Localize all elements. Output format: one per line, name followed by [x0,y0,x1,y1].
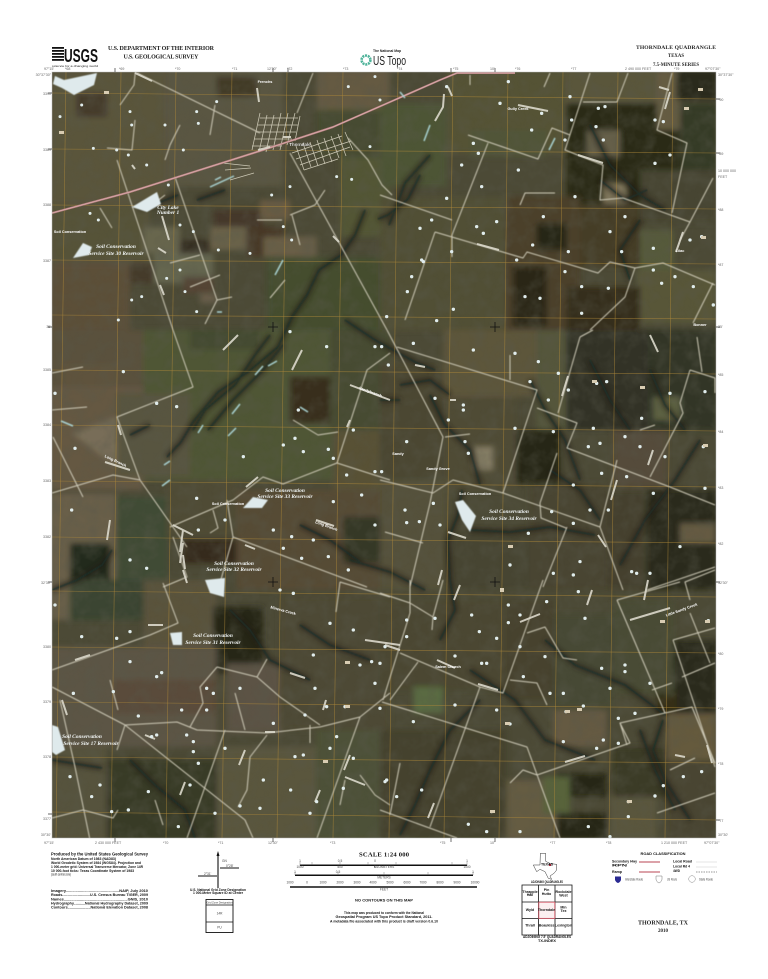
top coordinates: 97°15' [44,67,54,71]
bar labels: 0 [306,880,308,884]
local road swatch [696,862,717,867]
lake: Site 31 reservoir [170,632,182,645]
bottom coordinates: *73 [330,841,335,845]
top coordinates: *72 [287,67,292,71]
bar labels: FEET [380,888,388,892]
left coordinates: 3390 [43,92,51,96]
map margin coordinates and ticks [36,67,736,845]
bottom coordinates: 10' [490,841,495,845]
quadrangle name: THORNDALE QUADRANGLE [636,45,716,51]
label: Site 34 reservoir: Soil Conservation [489,509,529,515]
neighbor names: West [559,894,569,898]
state: TEXAS [668,54,684,59]
icon: interstate shield [615,876,621,883]
left coordinates: 3389 [43,148,51,152]
bar labels: 9000 [453,880,461,884]
label: Long Branch: Long Branch [104,454,127,468]
right road labels: 4WD [673,869,680,873]
survey name: U.S. GEOLOGICAL SURVEY [124,54,199,60]
ramp swatch [639,871,660,873]
bottom coordinates: *70 [163,841,168,845]
right coordinates: 32'30" [718,581,729,585]
label: Thrall Cemetery: Frenchs [258,80,272,84]
left coordinates: 3379 [43,700,51,704]
bar labels: 5000 [386,880,394,884]
adjoining quadrangles index [522,880,572,943]
index footer: TX-INDEX [538,939,557,943]
box labels: Grid Zone Designation [207,900,233,904]
Texas label: TEXAS [541,862,554,866]
box labels: 14R [217,912,223,916]
US route label: US Route [667,878,677,882]
bar labels: 0.5 [338,859,342,863]
bar labels: 1000 [296,865,304,869]
left coordinates: 30°30' [41,833,51,837]
right coordinates: *87 [718,263,723,267]
bottom coordinates: 97°15' [44,841,54,845]
map labels [54,80,707,747]
bar labels: 7000 [419,880,427,884]
index footer: ADJOINING 7.5' QUADRANGLES [523,935,572,939]
label: Site 31 reservoir second line: Service Site 31 Reservoir [185,640,242,646]
data sources: Roads...........................U.S. Census Bureau TIGER, 2009 [51,893,148,897]
label: Long Branch east: Long Branch [315,520,339,532]
neighbor names: Wyld [526,908,534,912]
neighbor names: Lexington [555,924,572,928]
bottom coordinates: 2 430 000 FEET [95,841,122,845]
legend: road classification [612,852,717,883]
national map caption: The National Map [373,49,401,53]
meters bar [295,874,473,876]
bar labels: 1000 [286,880,294,884]
lake: Site 30 reservoir [73,243,92,258]
label: cemetery: Sandy Grove [426,467,450,471]
production heading: Produced by the United States Geological Survey [51,852,148,856]
label: dam name: Soil Conservation [54,230,87,234]
bar labels: 3000 [353,880,361,884]
left coordinates: 3385 [43,368,51,372]
right coordinates: *83 [718,486,723,490]
lake: City Lake Number 1 [132,192,161,212]
data sources: Imagery.................................................NAIP, July 2010 [51,889,148,893]
header: US Topo logo [362,49,406,68]
left coordinates: 3380 [43,645,51,649]
left coordinates: 3384 [43,423,51,427]
icon: USGS wave logo [52,47,64,61]
4WD swatch [696,871,717,873]
bar labels: 0.5 [336,870,340,874]
datum and projection lines: 1 000-meter grid: Universal Transverse Mercator, Zone 14R [51,865,143,869]
tan cleared pads [59,88,710,813]
bar labels: 10000 [471,880,480,884]
quarter-quad cross markers [268,322,500,587]
mottled vegetation texture [52,72,716,838]
label: City Lake Number 1: City Lake [157,205,179,211]
label: Site 33 reservoir: Soil Conservation [265,488,305,494]
neighbor names: Min [560,906,567,910]
lakes and reservoirs [52,73,555,755]
header: USGS logo and agency [52,45,215,68]
label: Gold Creek: Gully Creek [507,107,529,111]
top coordinates: 97°07'30" [705,67,721,71]
right road labels: Local Road [673,860,692,864]
box frame [206,900,233,932]
icon: US Topo emblem [362,56,370,64]
top coordinates: *71 [232,67,237,71]
right coordinates: *77 [718,819,723,823]
index heading: ADJOINING QUADRANGLES [531,880,563,884]
wooded stream corridors [52,125,700,838]
label: town on east edge: Lilac [676,249,684,253]
top coordinates: 2 490 000 FEET [625,67,652,71]
bottom coordinates: 97°07'30" [704,841,720,845]
label: Site 30 reservoir: Soil Conservation [96,244,136,250]
left coordinates: 3383 [43,479,51,483]
right coordinates: *90 [718,98,723,102]
declination labels: GN [222,859,227,863]
left road labels: Ramp [612,870,623,874]
right coordinates: 10 000 000 [718,169,736,173]
lake: Site 34 reservoir [455,500,476,532]
right coordinates: *78 [718,762,723,766]
quad location marker [549,864,551,866]
right coordinates: *82 [718,542,723,546]
declination labels: 0°28' [226,864,234,868]
neighbor names: Pin [544,888,549,892]
label: Site 33 reservoir second line: Service Site 33 Reservoir [257,494,314,500]
bar labels: 8000 [436,880,444,884]
right coordinates: 30°30' [718,833,728,837]
label: City Lake Number 1 second line: Number 1 [156,210,179,216]
top coordinates: *79 [674,67,679,71]
top coordinates: *75 [453,67,458,71]
neighbor names: Thrapple [522,890,538,894]
neighbor names: Thorndale [538,908,555,912]
datum and projection lines: World Geodetic System of 1984 (WGS84). Projection and [51,861,141,865]
highway [52,73,515,213]
right coordinates: 30°37'30" [718,73,734,77]
state route label: State Route [699,878,713,882]
left coordinates: 30°37'30" [36,73,52,77]
bottom coordinates: *77 [550,841,555,845]
bar labels: 500 [337,865,343,869]
label: Site label road: Salem Church [435,665,461,669]
Thorndale highlight [539,902,555,918]
right coordinates: *89 [718,152,723,156]
label: Site 32 reservoir: Soil Conservation [214,561,254,567]
top coordinates: 10' [490,67,495,71]
label: Sandy Creek: Sandybranch [358,386,383,398]
lake: Site 33 reservoir [243,497,268,508]
bar labels: 2000 [336,880,344,884]
neighbor names: Tex [561,909,566,913]
scattered stock ponds [55,77,713,837]
contour note: NO CONTOURS ON THIS MAP [355,898,414,902]
datum and projection lines: 10 000-foot ticks: Texas Coordinate System of 1983 [51,869,134,873]
lake: Site 32 reservoir [205,578,225,597]
map name: THORNDALE, TX [638,920,688,926]
Texas outline [533,853,557,879]
map title block [638,920,688,934]
bar labels: 0 [374,859,376,863]
department name: U.S. DEPARTMENT OF THE INTERIOR [108,46,215,52]
bar labels: KILOMETERS [374,865,394,869]
standards note: This map was produced to conform with the National [344,911,424,915]
left coordinates: 35' [46,325,51,329]
top coordinates: *70 [175,67,180,71]
neighbor names: Beaukiss [539,924,554,928]
top coordinates: *76 [515,67,520,71]
label: Site 34 dam: Soil Conservation [459,492,492,496]
top coordinates: *77 [571,67,576,71]
north arrow and declination [190,851,246,895]
bar labels: 1 [299,859,301,863]
right coordinates: *85 [718,373,723,377]
lake: northwest stock tank [53,73,97,95]
credits: production notes [51,852,148,910]
arrow head [216,851,220,856]
bar ticks [295,862,473,875]
declination note: 1 000-Meter Square ID at Center [193,891,244,895]
feet bar [290,886,477,888]
town of Thorndale street grid [222,113,353,180]
road network [52,65,715,840]
stream-channel ponds [61,92,555,486]
label: Granger Creek: Minerva Creek [270,605,297,616]
header: quadrangle title [636,45,716,68]
left coordinates: 32'30" [41,581,52,585]
tick marks [48,68,720,842]
interstate label: Interstate Route [625,878,643,882]
label: Good Hope: Sandy [392,452,405,456]
scale heading: SCALE 1:24 000 [359,852,410,858]
label: Site 32 reservoir second line: Service Site 32 Reservoir [206,567,263,573]
arrow shaft [198,854,239,888]
label: Site 17 reservoir second line: Service Site 17 Reservoir [63,741,120,747]
right coordinates: *84 [718,430,723,434]
right coordinates: 35' [718,325,723,329]
standards note: Geospatial Program US Topo Product Standard, 2011. [336,915,432,919]
legend heading: ROAD CLASSIFICATION [640,852,686,856]
grid frame [522,885,572,935]
standards note: A metadata file associated with this product is draft version 0.6.10 [330,920,438,924]
right coordinates: FEET [718,175,728,179]
data sources: Contours......................National Elevation Dataset, 2008 [51,906,148,910]
right coordinates: *80 [718,652,723,656]
USGS tagline: science for a changing world [52,64,98,68]
bottom coordinates: *78 [606,841,611,845]
bottom coordinates: *71 [218,841,223,845]
bar labels: 1 [472,870,474,874]
US Topo wordmark: US Topo [373,54,406,68]
locator: Texas state outline [533,853,557,879]
datum and projection lines: (south central zone) [51,872,71,876]
label: Thorndale: Thorndale [289,142,311,147]
label: Site 31 reservoir: Soil Conservation [193,633,233,639]
neighbor names: Hutto [542,892,552,896]
top coordinates: *69 [119,67,124,71]
data sources: Hydrography...........National Hydrography Dataset, 2009 [51,902,148,906]
UTM grid lines [52,72,716,838]
series: 7.5-MINUTE SERIES [653,63,699,68]
left coordinates: 3377 [43,817,51,821]
label: church at east edge: Bonner [693,323,707,327]
USGS wordmark: USGS [64,45,98,66]
bar labels: 1000 [463,865,471,869]
top coordinates: *68 [65,67,70,71]
label: Site 34 reservoir second line: Service Site 34 Reservoir [481,516,538,522]
neighbor names: Thrall [525,924,535,928]
left coordinates: 3382 [43,535,51,539]
bar labels: METERS [377,876,391,880]
left road labels: RPN [612,864,628,868]
icon: state route circle [689,876,695,882]
top coordinates: *74 [397,67,402,71]
kilometers bar [300,864,467,866]
creek channels [52,125,700,838]
left coordinates: 3388 [43,203,51,207]
declination note: U.S. National Grid Zone Designation [190,888,246,892]
grid zone box [206,900,233,932]
land cover patches [50,70,717,840]
left coordinates: 3378 [43,755,51,759]
bottom coordinates: 1 210 000 FEET [661,841,688,845]
box labels: PU [217,926,222,930]
box dividers [206,905,233,922]
scale bars [286,852,480,924]
top coordinates: *73 [343,67,348,71]
right coordinates: *88 [718,208,723,212]
left road labels: Secondary Hwy [612,860,637,864]
icon: US route shield [656,876,662,883]
neighbor names: Hall [527,893,533,897]
right coordinates: *79 [718,707,723,711]
bar labels: 1 [294,870,296,874]
map year: 2010 [658,929,668,934]
bar labels: 1000 [319,880,327,884]
map: aerial imagery quadrangle [50,65,717,840]
left coordinates: 3387 [43,259,51,263]
label: Little Sandy Creek: Little Sandy Creek [665,602,699,618]
label: Site 17 reservoir: Soil Conservation [62,734,102,740]
label: Site 30 reservoir second line: Service Site 30 Reservoir [88,251,145,257]
bar labels: 4000 [369,880,377,884]
secondary highway swatch [639,861,660,863]
bar labels: 6000 [403,880,411,884]
map neatline [52,72,716,838]
neighbor names: Rockdale [556,890,571,894]
top coordinates: 12'30" [267,67,278,71]
road name labels [62,73,712,818]
bottom coordinates: 12'30" [268,841,279,845]
bar labels: 0 [374,865,376,869]
right road labels: Local Rd 4 [673,864,690,868]
data sources: Names...........................................................GNIS, 2010 [51,898,148,902]
lake: Site 17 reservoir [52,725,65,755]
datum and projection lines: North American Datum of 1983 (NAD83) [51,857,117,861]
declination labels: 2°31' [204,872,212,876]
bar labels: 1 [466,859,468,863]
label: Site 33 dam: Soil Conservation [212,502,245,506]
bottom coordinates: *75 [440,841,445,845]
